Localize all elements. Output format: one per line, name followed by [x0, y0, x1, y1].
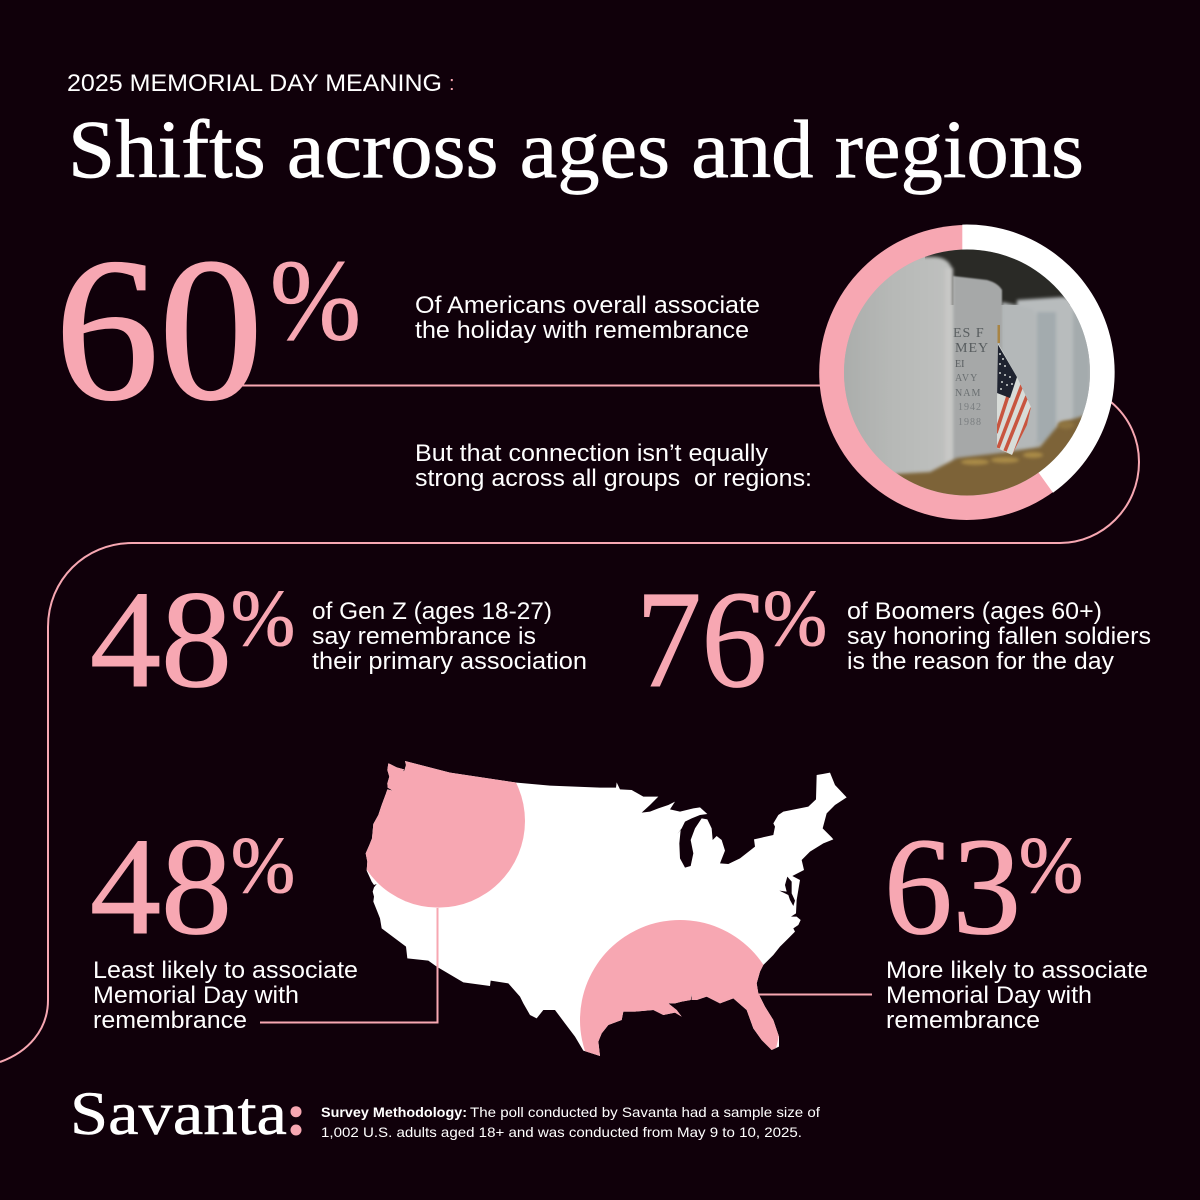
- stat: west 48 percent: [90, 810, 295, 964]
- text: least likely: Least likely to associate: [93, 957, 358, 984]
- text: more likely: More likely to associate: [886, 957, 1148, 984]
- logo: Savanta: Savanta: [70, 1081, 287, 1148]
- stat: Gen Z 48 percent: %: [231, 573, 295, 663]
- kicker heading: 2025 MEMORIAL DAY MEANING: [67, 70, 442, 97]
- region highlights: west and southeast: [366, 761, 779, 1056]
- connector line from photo wrapping down the left side: [0, 402, 1139, 1062]
- survey methodology note: [321, 1104, 820, 1140]
- stat: 60 percent: %: [270, 237, 361, 365]
- text: Boomers: is the reason for the day: [847, 648, 1114, 675]
- ground flecks: [961, 421, 1074, 465]
- stat: Boomers 76 percent: %: [763, 573, 827, 663]
- stat: Gen Z 48 percent: 48: [90, 563, 232, 717]
- gravestone inscription: [953, 326, 989, 428]
- leader line: southeast region: [757, 994, 872, 996]
- text: Gen Z: of Gen Z (ages 18-27): [312, 598, 552, 625]
- gravestone inscription: 1942: [958, 402, 982, 413]
- text: Gen Z: their primary association: [312, 648, 587, 675]
- gravestone inscription: EI: [955, 359, 964, 370]
- stat: southeast 63 percent: [884, 810, 1083, 964]
- stat: southeast 63 percent: 63: [884, 810, 1021, 964]
- connector line from 60 percent to the photo: [240, 384, 822, 386]
- gravestone inscription: 1988: [958, 417, 982, 428]
- text: Boomers: say honoring fallen soldiers: [847, 623, 1151, 650]
- stat: southeast 63 percent: %: [1019, 820, 1083, 910]
- stat: Boomers 76 percent: 76: [636, 563, 767, 717]
- text: connection not equal: [415, 440, 812, 492]
- text: Gen Z: [312, 598, 587, 675]
- text: least likely: remembrance: [93, 1007, 247, 1034]
- gravestone inscription: MEY: [955, 341, 989, 356]
- donut chart with photo: [819, 225, 1115, 520]
- text: Americans overall: [415, 292, 760, 344]
- survey methodology note: Survey Methodology:: [321, 1104, 467, 1120]
- text: Americans overall: Of Americans overall associate: [415, 292, 760, 319]
- gravestone inscription: NAM: [955, 388, 981, 399]
- stat: west 48 percent: %: [231, 820, 295, 910]
- text: Boomers: of Boomers (ages 60+): [847, 598, 1102, 625]
- survey methodology note: 1,002 U.S. adults aged 18+ and was conducted from May 9 to 10, 2025.: [321, 1124, 802, 1140]
- gravestone inscription: AVY: [955, 373, 978, 384]
- photo: gravestones and flag: [838, 245, 1095, 500]
- text: connection not equal: But that connection isn’t equally: [415, 440, 768, 467]
- text: Boomers: [847, 598, 1151, 675]
- text: more likely: Memorial Day with: [886, 982, 1092, 1009]
- text: connection not equal: strong across all groups or regions:: [415, 465, 812, 492]
- gravestone inscription: ES F: [953, 326, 985, 341]
- text: least likely: [93, 957, 358, 1034]
- kicker heading: :: [449, 73, 455, 95]
- text: Gen Z: say remembrance is: [312, 623, 536, 650]
- stat: 60 percent: 60: [55, 217, 263, 443]
- flag: [997, 325, 1031, 455]
- title: Shifts across ages and regions: [68, 103, 1084, 195]
- text: more likely: [886, 957, 1148, 1034]
- leader line: west region: [260, 908, 438, 1022]
- map of the United States: [366, 761, 847, 1056]
- stat: Gen Z 48 percent: [90, 563, 295, 717]
- chesapeake bay: [779, 877, 795, 906]
- stat: west 48 percent: 48: [90, 810, 232, 964]
- stat: 60 percent: [55, 217, 361, 443]
- text: Americans overall: the holiday with remembrance: [415, 317, 749, 344]
- survey methodology note: The poll conducted by Savanta had a sample size of: [470, 1104, 820, 1120]
- text: more likely: remembrance: [886, 1007, 1040, 1034]
- text: least likely: Memorial Day with: [93, 982, 299, 1009]
